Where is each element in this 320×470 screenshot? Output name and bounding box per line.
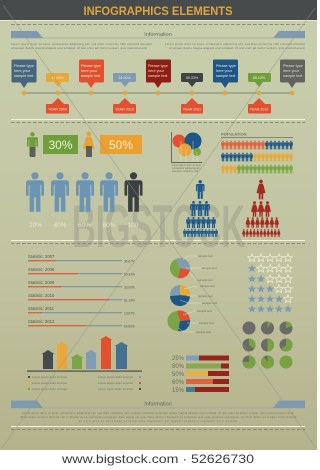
intro text right xyxy=(165,42,305,50)
statistic bars: 33.00% xyxy=(124,286,135,290)
bottom text block: at vero eros et accumsan et iusto odio dignissim qui blandit praesent luptatum zzril delenit xyxy=(79,420,237,423)
bottom text block: Lorem ipsum dolor sit amet, consectetur adipiscing elit, sed diam nonummy nibh euismod tincidunt ut laoreet dolore magna aliquam erat volutpat. Ut wisi enim ad minim veniam, quis nostrud exerci tation xyxy=(22,412,295,415)
year tag 2009 xyxy=(46,98,69,114)
gender stat: female xyxy=(83,132,142,157)
callout: grey: sample text xyxy=(283,74,303,78)
callout: red: here your xyxy=(81,69,98,73)
callout: grey xyxy=(280,60,305,88)
callout: blue: Please type xyxy=(14,64,34,68)
gender stat: female: 50% xyxy=(109,138,133,152)
year tag 2011: YEAR 2011 xyxy=(183,108,201,112)
pie 2 xyxy=(170,285,190,306)
arrow chart legend: Lorem ipsum dolor sit amet xyxy=(32,375,67,379)
callout: navy: here your xyxy=(216,69,233,73)
section heading: bottom information: Information xyxy=(144,402,172,408)
star ratings xyxy=(248,254,292,313)
callout: grey: Please type xyxy=(283,64,303,68)
callout: dark red: Please type xyxy=(148,64,168,68)
person 20%: 20% xyxy=(29,222,42,229)
percentage stacked bars: 60% xyxy=(172,380,185,386)
statistic bars: Statistic: 2009 xyxy=(28,280,55,285)
statistic bars: Statistic: 2010 xyxy=(28,293,55,298)
title: INFOGRAPHICS ELEMENTS xyxy=(84,4,232,18)
pie charts: sample text xyxy=(198,254,213,258)
callout: dark red: here your xyxy=(148,69,165,73)
callout: blue: here your xyxy=(14,69,31,73)
year tag 2010 xyxy=(113,98,136,114)
pie charts: sample text xyxy=(202,301,217,305)
callout: dark red: sample text xyxy=(148,74,168,78)
year tag 2012: YEAR 2012 xyxy=(250,108,268,112)
person 60%: 60% xyxy=(78,222,91,229)
statistic bars: 30.67% xyxy=(124,260,135,264)
people percentage row xyxy=(26,172,142,229)
callout: charcoal value: 55.33% xyxy=(186,76,199,80)
person 100%: 100 xyxy=(128,222,139,229)
callout: steel value xyxy=(113,73,136,87)
callout: blue: sample text xyxy=(14,74,34,78)
pie 3 xyxy=(167,311,190,331)
statistic bars: 55.33% xyxy=(124,272,135,276)
callout: red xyxy=(79,60,104,88)
gender stat: male: 30% xyxy=(48,138,73,152)
person 80%: 80% xyxy=(102,222,116,229)
section heading: top information: Information xyxy=(144,32,172,38)
statistic bars: Statistic: 2008 xyxy=(28,267,55,272)
statistic bars: 81.13% xyxy=(124,298,135,302)
callout: steel value: 24.00% xyxy=(118,76,131,80)
callout: grey: here your xyxy=(283,69,300,73)
year tag 2009: YEAR 2009 xyxy=(48,108,67,112)
pie 1 xyxy=(170,258,190,278)
blue male pyramid xyxy=(183,180,218,237)
population heading xyxy=(221,132,293,138)
gender stat: male xyxy=(27,132,78,157)
arrow chart legend xyxy=(28,375,141,391)
section heading: top information xyxy=(11,31,305,38)
percentage stacked bars xyxy=(172,356,229,394)
callout: navy: Please type xyxy=(216,64,236,68)
arrow chart legend: Lorem ipsum dolor sit amet xyxy=(98,381,133,385)
pie charts: sample text xyxy=(200,284,215,288)
red female pyramid xyxy=(242,180,280,237)
bubble chart: consectetur adipiscing elit xyxy=(172,167,200,170)
bubble chart: sed diam nonummy nibh xyxy=(172,170,199,173)
stock footer: www.bigstock.com · 52626730 xyxy=(61,452,254,466)
intro text left: ut laoreet dolore magna aliquam erat volutpat. Ut wisi enim ad minim veniam, quis nostrud exerci xyxy=(11,46,147,50)
percentage stacked bars: 80% xyxy=(172,364,185,370)
percentage stacked bars: 25% xyxy=(172,356,185,362)
header bar xyxy=(0,0,317,21)
pie charts: sample text xyxy=(202,266,217,270)
intro text left xyxy=(11,42,152,50)
year tag 2012 xyxy=(248,98,271,114)
pie charts: sample text xyxy=(198,278,213,282)
callout: green value: 85.12% xyxy=(253,76,266,80)
callout: red: Please type xyxy=(81,64,101,68)
pie charts: sample text xyxy=(199,321,214,325)
bottom text block: ullamcorper suscipit lobortis nisl ut aliquip ex ea commodo consequat. Duis autem vel eum iriure dolor in hendrerit in vulputate velit esse molestie consequat, vel illum dolore eu feugiat nulla facilisis xyxy=(20,416,297,419)
timeline xyxy=(12,60,305,114)
arrow chart legend: Lorem ipsum dolor sit amet xyxy=(98,387,133,391)
intro text right: ut laoreet dolore magna aliquam erat volutpat. Ut wisi enim ad minim veniam, quis nostrud exerci xyxy=(169,46,305,50)
statistic bars: Statistic: 2011 xyxy=(28,306,55,311)
callout: navy xyxy=(213,60,238,88)
year tag 2010: YEAR 2010 xyxy=(115,108,134,112)
arrow chart legend: Lorem ipsum dolor sit amet xyxy=(32,381,67,385)
pie charts xyxy=(167,254,217,334)
percentage stacked bars: 15% xyxy=(172,388,185,394)
pie charts: sample text xyxy=(198,294,213,298)
arrow chart legend: Lorem ipsum dolor sit amet xyxy=(32,387,67,391)
arrow chart legend: Lorem ipsum dolor sit amet xyxy=(98,375,133,379)
year tag 2011 xyxy=(181,98,203,114)
statistic bars xyxy=(28,254,135,328)
population pictogram xyxy=(221,141,293,173)
callout: yellow value: 14.00% xyxy=(51,76,64,80)
callout: dark red xyxy=(146,60,171,88)
callout: yellow value xyxy=(46,73,69,87)
callout: navy: sample text xyxy=(216,74,236,78)
callout: green value xyxy=(248,73,271,87)
callout: charcoal value xyxy=(181,73,203,87)
person 40%: 40% xyxy=(53,222,67,229)
bubble chart: Lorem ipsum dolor sit amet xyxy=(172,164,201,167)
statistic bars: Statistic: 2007 xyxy=(28,254,55,259)
callout: red: sample text xyxy=(81,74,101,78)
intro text right: Lorem ipsum dolor sit amet, consectetur adipiscing elit, sed diam nonummy nibh euismod tincidunt xyxy=(165,42,305,46)
statistic bars: Statistic: 2012 xyxy=(28,319,55,324)
callout: blue xyxy=(12,60,36,88)
statistic bars: 64.63% xyxy=(124,324,135,328)
percentage stacked bars: 50% xyxy=(172,372,185,378)
statistic bars: 13.87% xyxy=(124,312,135,316)
bubble chart xyxy=(172,132,202,173)
bottom text block xyxy=(20,412,297,423)
progress circles xyxy=(242,322,292,369)
section heading: bottom information xyxy=(11,400,305,408)
pie charts: sample text xyxy=(197,309,212,313)
arrow bar chart xyxy=(27,336,142,372)
population heading: POPULATION xyxy=(221,132,247,136)
intro text left: Lorem ipsum dolor sit amet, consectetur adipiscing elit, sed diam nonummy nibh euismod tincidunt xyxy=(11,42,152,46)
pie charts: sample text xyxy=(196,330,211,334)
